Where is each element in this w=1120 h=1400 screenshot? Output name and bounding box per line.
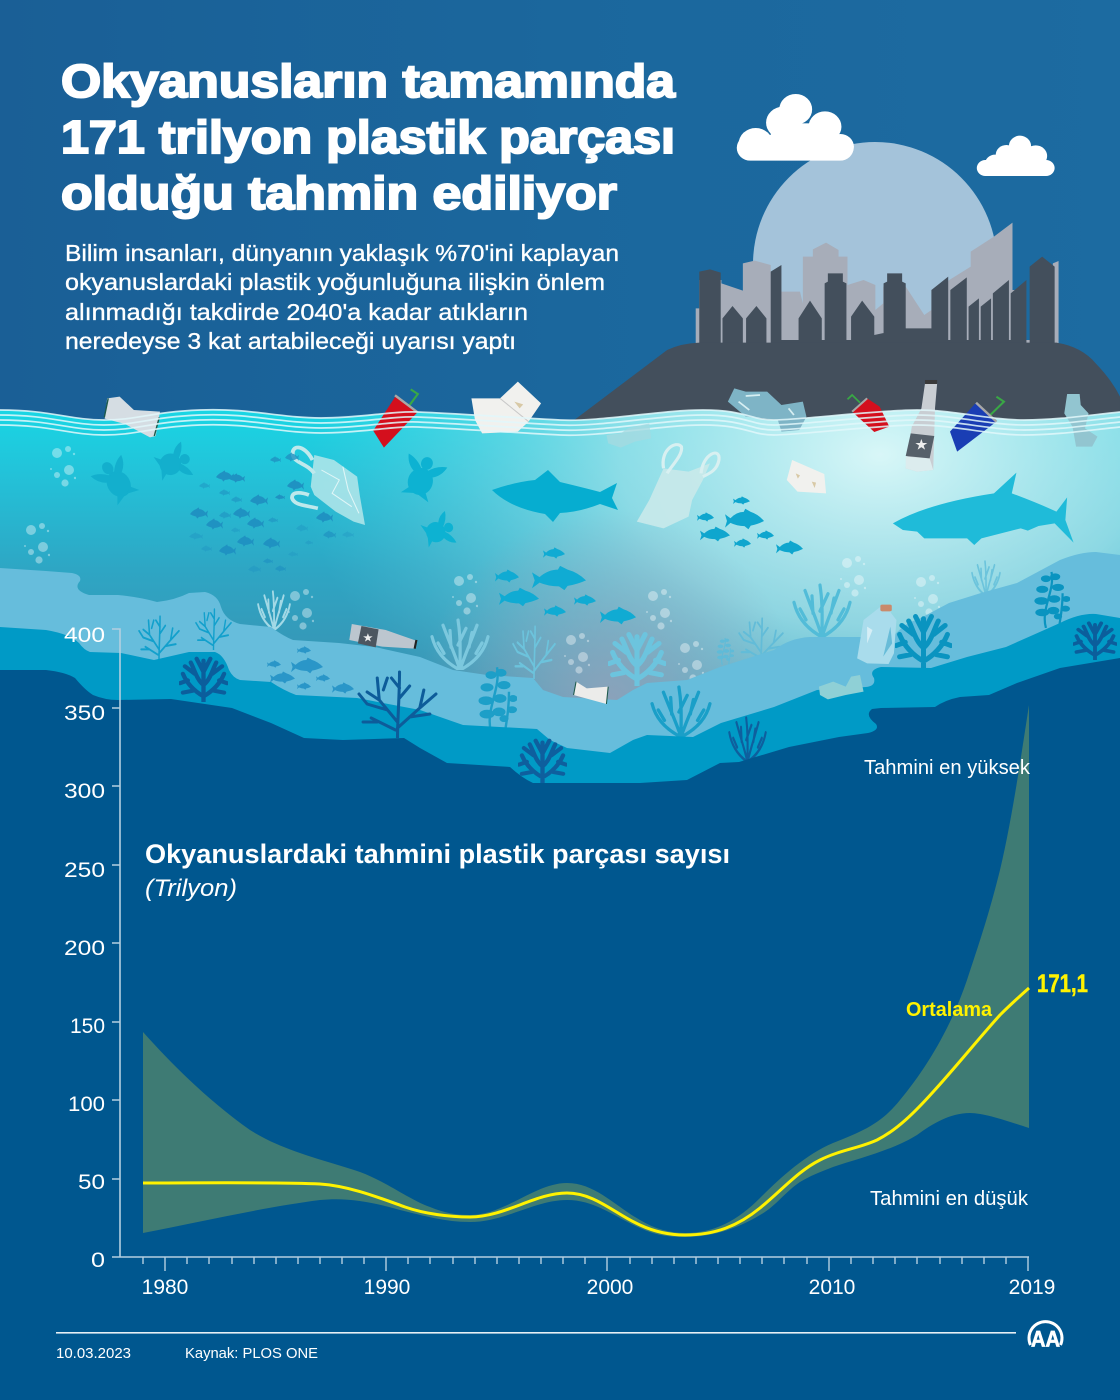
coral pale 1 — [258, 592, 290, 630]
x axis labels: 1990 — [364, 1276, 410, 1299]
coral dark thin — [729, 718, 766, 762]
intro paragraph: okyanuslardaki plastik yoğunluğuna ilişkin önlem — [65, 269, 605, 295]
plastic: glass bottle with star label: ★ — [914, 437, 928, 453]
plastic: clear bottle right — [1064, 394, 1097, 447]
city and island — [574, 223, 1120, 440]
x axis labels: 2010 — [809, 1276, 855, 1299]
source: Kaynak: PLOS ONE — [185, 1345, 318, 1362]
plastic: crumpled PET bottle — [728, 388, 806, 432]
turtles — [89, 441, 459, 552]
reef band: dark — [0, 658, 1120, 800]
title: olduğu tahmin ediliyor — [61, 167, 617, 219]
fish school centre — [495, 547, 636, 624]
water — [0, 410, 1120, 800]
bubbles: group 6 — [840, 556, 866, 597]
bubbles: group 4 — [452, 574, 478, 615]
coral pale 3 — [513, 627, 555, 679]
y axis labels — [64, 624, 105, 1272]
bubbles: group 8 — [678, 641, 704, 682]
intro paragraph: Bilim insanları, dünyanın yaklaşık %70'ini kaplayan — [65, 240, 619, 266]
y axis labels: 200 — [64, 937, 105, 960]
pale corals behind reef — [258, 561, 1000, 686]
light glow — [200, 410, 1120, 800]
sun — [753, 142, 997, 330]
plastic: ghost bottle — [606, 423, 651, 448]
seaweed right — [1035, 572, 1070, 628]
plastic: white clamshell — [471, 382, 541, 433]
plastic: crumpled bottle on reef — [819, 675, 864, 699]
cloud large — [737, 94, 854, 161]
label: highest estimate: Tahmini en yüksek — [864, 757, 1031, 779]
footer rule — [56, 1332, 1016, 1334]
y axis labels: 100 — [68, 1093, 105, 1116]
x axis — [120, 1257, 1029, 1271]
coral dark centre — [519, 741, 566, 783]
intro paragraph — [65, 240, 619, 354]
coral fan centre — [652, 687, 710, 737]
bubbles: group 2 — [24, 523, 50, 564]
fish school right — [697, 496, 803, 554]
y axis labels: 350 — [64, 702, 105, 725]
coral pale 5 — [739, 618, 783, 663]
plastic bag left — [292, 447, 365, 525]
y axis labels: 150 — [70, 1015, 105, 1038]
coral dark right — [1074, 623, 1116, 660]
coral pale 4 — [609, 634, 665, 686]
chart unit: (Trilyon) — [145, 875, 237, 902]
bubbles: group 3 — [288, 589, 314, 630]
footer — [56, 1322, 1062, 1362]
reef band: mid — [0, 614, 1120, 800]
bubbles: group 5 — [646, 589, 672, 630]
logo AA: AA — [1031, 1326, 1060, 1352]
average line — [143, 988, 1029, 1235]
objects at the waterline — [104, 380, 1097, 472]
seaweed pale — [717, 638, 734, 665]
chart — [64, 624, 1088, 1299]
plastic: floating shard — [104, 397, 160, 437]
seaweed centre — [479, 667, 517, 732]
plastic: blue cup — [950, 397, 1004, 452]
coral pale 7 — [972, 561, 1000, 596]
surface waves — [0, 410, 1120, 435]
fish school lower — [267, 646, 354, 694]
y axis — [112, 629, 120, 1257]
bubbles: group 1 — [50, 446, 76, 487]
coral dark left — [180, 659, 227, 702]
background: sky — [0, 0, 1120, 430]
x axis labels — [142, 1276, 1055, 1299]
water body — [0, 410, 1120, 800]
bubbles: group 7 — [564, 633, 590, 674]
turtle 2 — [152, 441, 196, 486]
y axis labels: 400 — [64, 624, 105, 647]
bubbles: group 9 — [914, 575, 940, 616]
x axis labels: 2019 — [1009, 1276, 1055, 1299]
y axis labels: 0 — [91, 1249, 105, 1272]
title: Okyanusların tamamında — [61, 55, 675, 107]
turtle 4 — [419, 510, 459, 552]
island — [574, 343, 1120, 440]
coral bushy right — [896, 616, 951, 668]
plastic: small red cup — [847, 395, 889, 432]
plastic bag right — [637, 445, 719, 528]
buildings: grey back row — [696, 223, 1059, 347]
intro paragraph: neredeyse 3 kat artabileceği uyarısı yaptı — [65, 328, 516, 354]
y axis labels: 250 — [64, 859, 105, 882]
plastic: glass bottle with star label — [906, 380, 937, 472]
coral: thin left — [139, 616, 179, 660]
coral pale 6 — [794, 585, 850, 637]
coral dark branch centre — [359, 672, 436, 738]
plastic: jug — [857, 605, 896, 664]
background: deep sea lower fill — [0, 780, 1120, 1400]
plastic: bottle on seabed — [349, 624, 416, 649]
turtle 1 — [89, 452, 144, 508]
label: lowest estimate: Tahmini en düşük — [870, 1188, 1029, 1210]
turtle 3 — [395, 450, 448, 504]
plastic: white box on seabed — [574, 682, 608, 704]
plastic: red cup — [373, 389, 418, 448]
plastic: clamshell in water — [787, 460, 826, 493]
x axis labels: 1980 — [142, 1276, 188, 1299]
date: 10.03.2023 — [56, 1345, 131, 1362]
title — [61, 55, 675, 219]
reef band: light — [0, 552, 1120, 800]
estimate range area — [143, 705, 1029, 1237]
title: 171 trilyon plastik parçası — [61, 111, 675, 163]
shark — [893, 473, 1074, 545]
murky patch — [380, 510, 840, 800]
value: 171,1: 171,1 — [1037, 970, 1088, 998]
fish school left — [189, 452, 354, 573]
large fish — [492, 470, 618, 522]
y axis labels: 300 — [64, 780, 105, 803]
chart title: Okyanuslardaki tahmini plastik parçası sayısı — [145, 839, 730, 869]
plastic: bottle on seabed: ★ — [362, 632, 373, 645]
y axis labels: 50 — [78, 1171, 105, 1194]
intro paragraph: alınmadığı takdirde 2040'a kadar atıkların — [65, 299, 528, 325]
buildings: dark front row — [699, 257, 1055, 347]
x axis labels: 2000 — [587, 1276, 633, 1299]
cloud small — [977, 136, 1055, 176]
coral: thin left 2 — [196, 609, 231, 650]
coral pale 2 — [432, 620, 488, 670]
label: average: Ortalama — [906, 999, 993, 1021]
